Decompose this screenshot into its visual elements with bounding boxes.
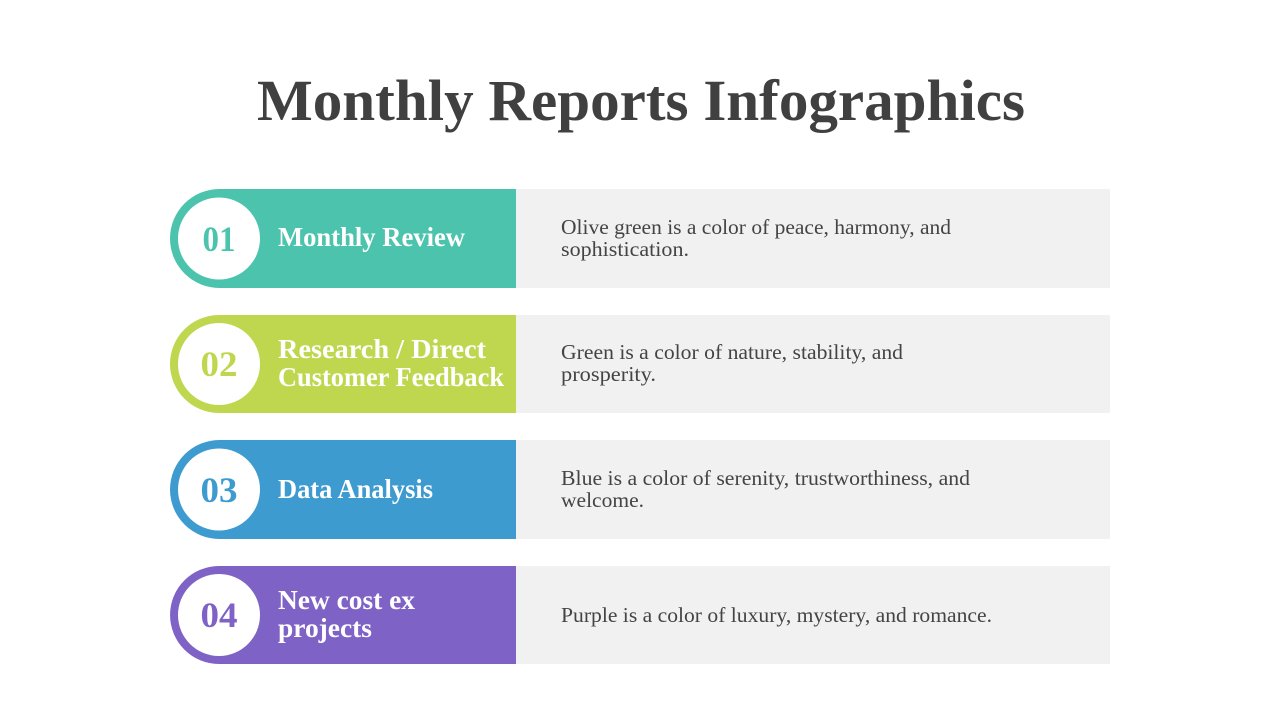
- panel: row 01 Monthly Review: [170, 189, 1110, 288]
- description 03: [561, 466, 970, 512]
- heading 01: Monthly Review: [278, 222, 465, 252]
- description background 02: [516, 315, 1110, 413]
- heading 02: Customer Feedback: [278, 362, 504, 392]
- colored pill 01: [170, 189, 516, 288]
- heading 03: Data Analysis: [278, 474, 433, 504]
- description 02: [561, 340, 903, 386]
- number badge 01: 01: [202, 219, 236, 259]
- description background 03: [516, 440, 1110, 539]
- description 01: [561, 215, 951, 261]
- number badge 01: [178, 198, 260, 280]
- heading 02: Research / Direct: [278, 334, 486, 364]
- description 02: Green is a color of nature, stability, and: [561, 340, 903, 364]
- colored pill 04: [170, 566, 516, 664]
- panel: row 04 New cost ex projects: [170, 566, 1110, 664]
- heading 02: [278, 334, 504, 392]
- heading 04: projects: [278, 613, 372, 643]
- heading 04: New cost ex: [278, 585, 416, 615]
- description background 01: [516, 189, 1110, 288]
- description 04: Purple is a color of luxury, mystery, and romance.: [561, 603, 992, 627]
- description 01: Olive green is a color of peace, harmony, and: [561, 215, 951, 239]
- panel: row 02 Research / Direct Customer Feedback: [170, 315, 1110, 413]
- number badge 02: 02: [200, 344, 238, 384]
- number badge 04: 04: [200, 595, 238, 635]
- description 02: prosperity.: [561, 362, 656, 386]
- number badge 02: [178, 323, 260, 405]
- number badge 03: [178, 448, 260, 530]
- description background 04: [516, 566, 1110, 664]
- title: Monthly Reports Infographics: [257, 68, 1025, 133]
- colored pill 02: [170, 315, 516, 413]
- number badge 03: 03: [200, 470, 238, 510]
- number badge 04: [178, 574, 260, 656]
- colored pill 03: [170, 440, 516, 539]
- description 03: Blue is a color of serenity, trustworthiness, and: [561, 466, 970, 490]
- description 03: welcome.: [561, 488, 644, 512]
- panel: row 03 Data Analysis: [170, 440, 1110, 539]
- description 01: sophistication.: [561, 237, 689, 261]
- heading 04: [278, 585, 416, 643]
